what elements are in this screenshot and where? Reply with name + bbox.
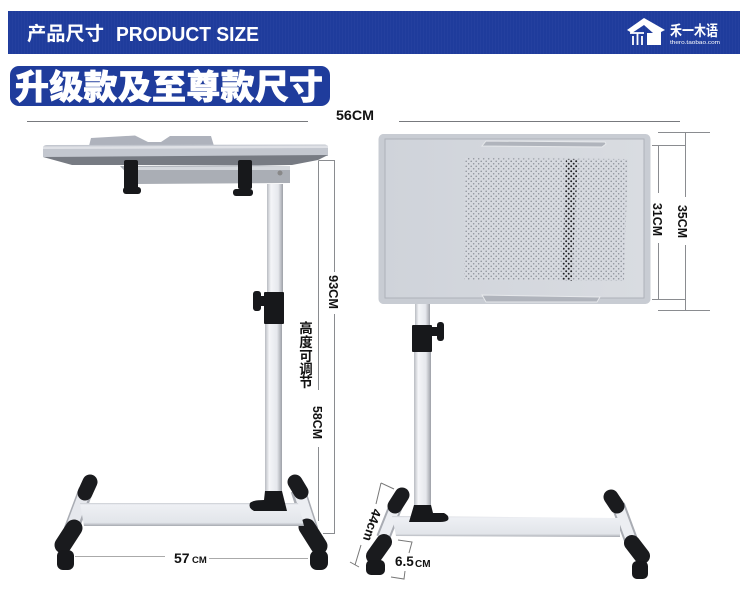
upper pole bbox=[415, 304, 430, 326]
left caster leg bbox=[366, 495, 402, 575]
height collar and knob bbox=[412, 322, 444, 352]
58CM dimension: 58CM bbox=[310, 406, 325, 439]
adjustable height label: 高 bbox=[299, 320, 313, 336]
top view dimensions bbox=[650, 132, 710, 310]
logo: 禾一木语 bbox=[670, 23, 718, 40]
57CM dimension: 57 bbox=[174, 550, 190, 566]
57CM dimension bbox=[75, 550, 308, 566]
57CM dimension: CM bbox=[192, 555, 207, 566]
35CM dimension: 35CM bbox=[675, 205, 690, 238]
header banner bbox=[8, 11, 740, 54]
logo: thero.taobao.com bbox=[670, 40, 720, 46]
perforation grid bbox=[464, 158, 628, 281]
header title: PRODUCT SIZE bbox=[116, 23, 259, 46]
bottom clip bbox=[482, 295, 600, 302]
6.5CM dimension bbox=[391, 540, 431, 579]
44cm dimension: 44cm bbox=[360, 507, 384, 543]
top clip bbox=[482, 141, 606, 147]
upper pole bbox=[267, 184, 283, 294]
adjustable height label: 节 bbox=[299, 374, 313, 390]
93CM dimension bbox=[318, 160, 341, 534]
side view table bbox=[43, 136, 328, 570]
6.5CM dimension: CM bbox=[415, 559, 431, 570]
adjustable height label: 调 bbox=[299, 362, 313, 377]
mounting bracket bbox=[120, 165, 290, 184]
width dimension 56CM: 56CM bbox=[336, 108, 374, 123]
lower pole bbox=[414, 352, 431, 508]
left caster leg bbox=[57, 482, 90, 570]
top view table bbox=[378, 134, 650, 304]
front stand bbox=[366, 304, 648, 579]
right caster leg bbox=[295, 482, 328, 570]
6.5CM dimension: 6.5 bbox=[395, 554, 414, 569]
base bar bbox=[392, 516, 620, 537]
side dimensions bbox=[75, 160, 341, 566]
header title bbox=[27, 23, 259, 46]
adjustable height label: 度 bbox=[299, 334, 313, 350]
clamp knobs bbox=[123, 160, 253, 196]
lower pole bbox=[265, 324, 282, 494]
inner surface bbox=[385, 139, 644, 298]
table top side view bbox=[43, 136, 328, 165]
adjustable height label bbox=[299, 320, 313, 390]
35CM dimension bbox=[658, 132, 710, 310]
foot plate bbox=[409, 505, 448, 522]
adjustable height label: 可 bbox=[299, 349, 313, 364]
93CM dimension: 93CM bbox=[326, 275, 341, 309]
logo bbox=[627, 18, 720, 46]
front stand dimensions bbox=[350, 483, 431, 579]
header title: 产品尺寸 bbox=[27, 23, 104, 45]
base bar bbox=[80, 503, 304, 526]
table panel bbox=[378, 134, 650, 304]
31CM dimension bbox=[650, 145, 685, 300]
height collar and knob bbox=[253, 291, 284, 324]
31CM dimension: 31CM bbox=[650, 203, 665, 236]
foot plate bbox=[250, 491, 287, 511]
right caster leg bbox=[611, 497, 648, 579]
section badge: 升级款及至尊款尺寸 bbox=[15, 69, 323, 107]
